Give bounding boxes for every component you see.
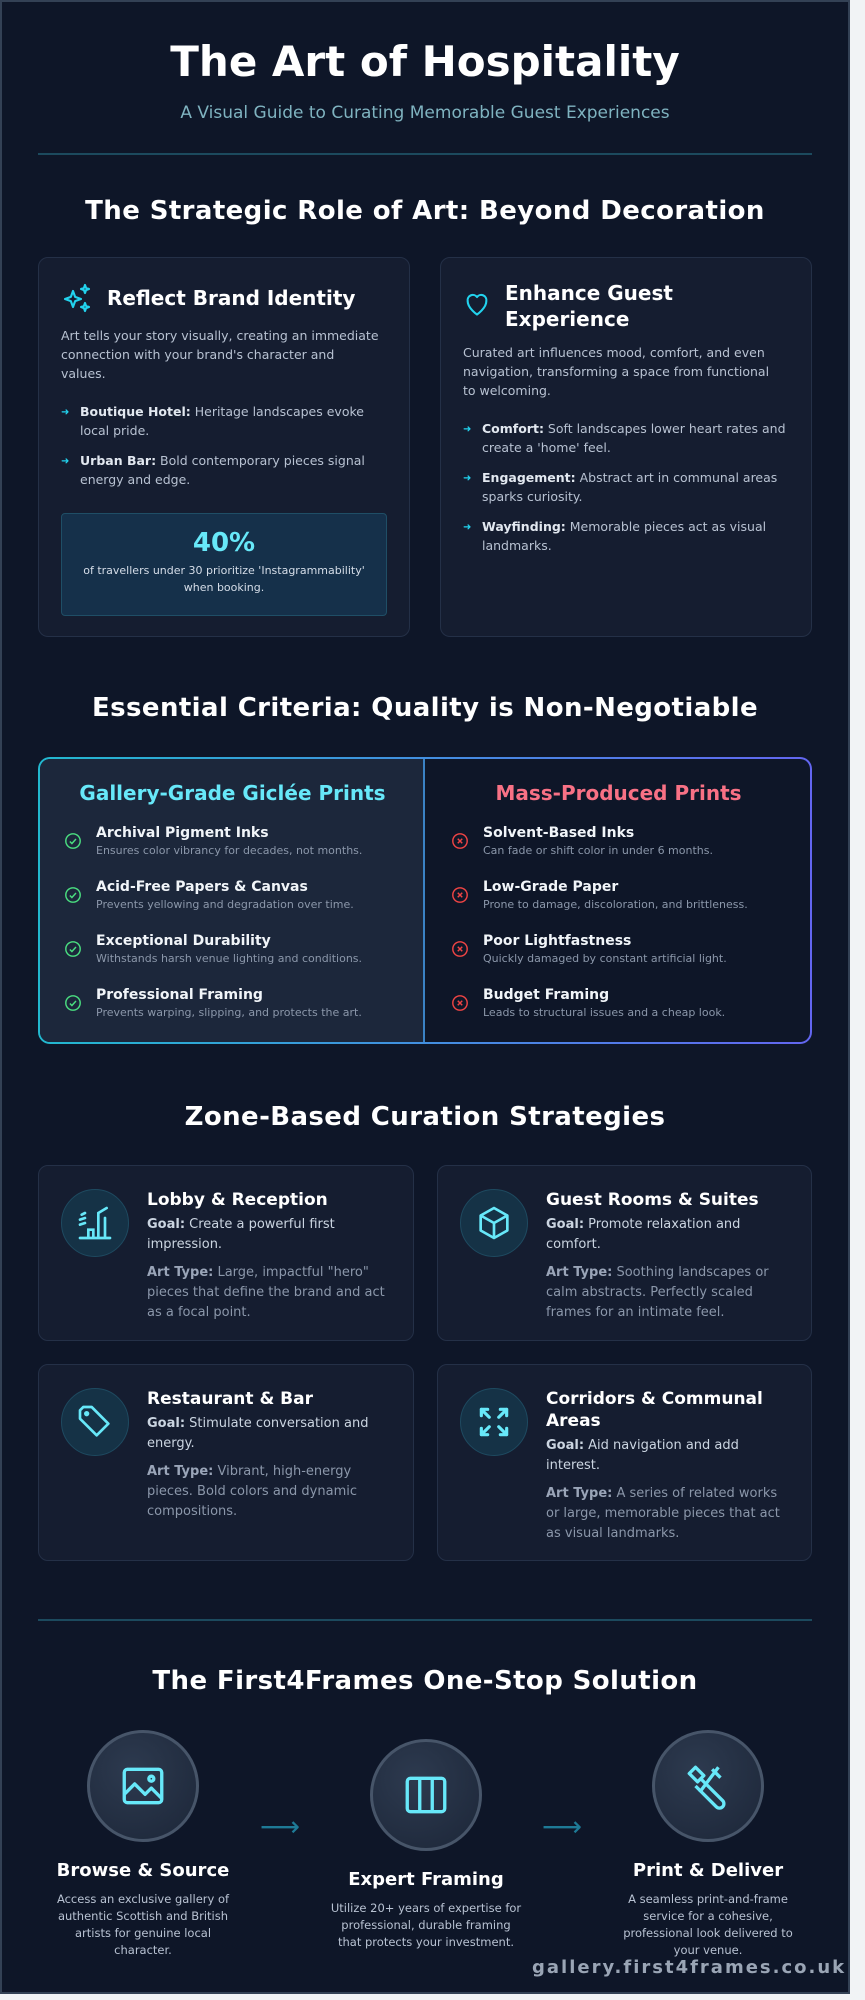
icon: cube bbox=[460, 1189, 528, 1257]
column: gallery-grade: Gallery-Grade Giclée Prints bbox=[79, 781, 386, 805]
step: print & deliver bbox=[623, 1730, 793, 1957]
panel: lobby: Art Type: Large, impactful "hero" pieces that define the brand and act as a focal point. bbox=[147, 1265, 385, 1320]
card title: Reflect Brand Identity bbox=[107, 286, 355, 310]
column: mass-produced bbox=[452, 781, 748, 1019]
column: mass-produced: Low-Grade Paper bbox=[483, 879, 618, 895]
panel: corridors: Areas bbox=[546, 1411, 601, 1431]
panel: guest rooms: Art Type: Soothing landscapes or calm abstracts. Perfectly scaled frames for an intimate feel. bbox=[546, 1265, 769, 1320]
panel: enhance guest experience bbox=[440, 257, 812, 637]
callout: 40% stat bbox=[61, 513, 387, 616]
card title: Enhance Guest bbox=[505, 281, 673, 305]
arrow: ⟶ bbox=[542, 1810, 582, 1843]
panel: corridors: Goal: Aid navigation and add interest. bbox=[546, 1438, 739, 1473]
panel: restaurant: Goal: Stimulate conversation and energy. bbox=[147, 1416, 368, 1451]
heading: one-stop solution: The First4Frames One-Stop Solution bbox=[152, 1666, 698, 1696]
card title: Experience bbox=[505, 307, 629, 331]
panel: lobby bbox=[38, 1165, 414, 1341]
panel: restaurant bbox=[38, 1364, 414, 1561]
column: gallery-grade: Acid-Free Papers & Canvas bbox=[96, 879, 308, 895]
panel: corridors: Corridors & Communal bbox=[546, 1389, 763, 1409]
subtitle: A Visual Guide to Curating Memorable Guest Experiences bbox=[180, 103, 670, 123]
column: mass-produced: Budget Framing bbox=[483, 987, 609, 1003]
step: browse & source bbox=[57, 1730, 230, 1957]
footer url: gallery.first4frames.co.uk bbox=[532, 1957, 846, 1978]
step: expert framing: Utilize 20+ years of expertise for bbox=[331, 1901, 521, 1915]
column: mass-produced: Solvent-Based Inks bbox=[483, 825, 634, 841]
column: gallery-grade: Ensures color vibrancy for decades, not months. bbox=[96, 844, 362, 857]
callout: 40% stat: of travellers under 30 prioritize 'Instagrammability' bbox=[83, 564, 365, 577]
panel: guest rooms: Goal: Promote relaxation and comfort. bbox=[546, 1217, 740, 1252]
bullets bbox=[62, 404, 365, 487]
title: The Art of Hospitality bbox=[170, 37, 680, 86]
step: expert framing: that protects your investment. bbox=[338, 1935, 514, 1949]
bullets: Wayfinding: Memorable pieces act as visual landmarks. bbox=[482, 519, 766, 553]
column: gallery-grade: Exceptional Durability bbox=[96, 933, 271, 949]
callout: 40% stat: 40% bbox=[193, 528, 255, 558]
icon: tag bbox=[61, 1388, 129, 1456]
panel: restaurant: Restaurant & Bar bbox=[147, 1389, 313, 1409]
panel: lobby: Lobby & Reception bbox=[147, 1190, 328, 1210]
column: gallery-grade: Professional Framing bbox=[96, 987, 263, 1003]
column: mass-produced: Mass-Produced Prints bbox=[495, 781, 742, 805]
icon: building bbox=[61, 1189, 129, 1257]
panel: lobby: Goal: Create a powerful first impression. bbox=[147, 1217, 335, 1252]
card title bbox=[505, 281, 673, 331]
callout: 40% stat: when booking. bbox=[184, 581, 264, 594]
bullets: Urban Bar: Bold contemporary pieces signal energy and edge. bbox=[80, 453, 365, 487]
icon: sparkles bbox=[64, 284, 90, 312]
panel: guest rooms bbox=[437, 1165, 812, 1341]
column: gallery-grade bbox=[40, 759, 425, 1042]
column: gallery-grade: Archival Pigment Inks bbox=[96, 825, 269, 841]
panel: reflect brand identity bbox=[38, 257, 410, 637]
step: print & deliver: Print & Deliver bbox=[633, 1860, 783, 1881]
bullets: Engagement: Abstract art in communal areas sparks curiosity. bbox=[482, 470, 777, 504]
step: expert framing: Expert Framing bbox=[348, 1869, 504, 1890]
bullets: Comfort: Soft landscapes lower heart rates and create a 'home' feel. bbox=[482, 421, 786, 455]
arrow: ⟶ bbox=[260, 1810, 300, 1843]
step: browse & source: Access an exclusive gallery of authentic Scottish and British artists for genuine local character. bbox=[57, 1892, 229, 1957]
column: gallery-grade: Prevents yellowing and degradation over time. bbox=[96, 898, 354, 911]
icon: expand arrows bbox=[460, 1388, 528, 1456]
column: mass-produced: Quickly damaged by constant artificial light. bbox=[483, 952, 727, 965]
step: print & deliver: A seamless print-and-frame service for a cohesive, professional look delivered to your venue. bbox=[623, 1892, 793, 1957]
icon: heart bbox=[466, 294, 488, 316]
column: mass-produced: Poor Lightfastness bbox=[483, 933, 631, 949]
panel: corridors bbox=[437, 1364, 812, 1561]
panel: restaurant: Art Type: Vibrant, high-energy pieces. Bold colors and dynamic compositions. bbox=[147, 1464, 357, 1519]
step: expert framing: professional, durable framing bbox=[341, 1918, 511, 1932]
panel: corridors: Art Type: A series of related works or large, memorable pieces that act as visual landmarks. bbox=[546, 1486, 780, 1541]
step: expert framing bbox=[331, 1739, 522, 1949]
heading: strategic role: The Strategic Role of Art: Beyond Decoration bbox=[85, 196, 765, 226]
column: mass-produced: Prone to damage, discoloration, and brittleness. bbox=[483, 898, 748, 911]
column: mass-produced: Can fade or shift color in under 6 months. bbox=[483, 844, 713, 857]
text block: Art tells your story visually, creating an immediate connection with your brand's character and values. bbox=[61, 328, 379, 381]
bullets: Boutique Hotel: Heritage landscapes evoke local pride. bbox=[80, 404, 364, 438]
column: gallery-grade: Withstands harsh venue lighting and conditions. bbox=[96, 952, 362, 965]
column: gallery-grade: Prevents warping, slipping, and protects the art. bbox=[96, 1006, 362, 1019]
heading: essential criteria: Essential Criteria: Quality is Non-Negotiable bbox=[92, 693, 758, 723]
heading: zones: Zone-Based Curation Strategies bbox=[185, 1102, 665, 1132]
step: browse & source: Browse & Source bbox=[57, 1860, 229, 1881]
text block: Curated art influences mood, comfort, and even navigation, transforming a space from functional to welcoming. bbox=[463, 345, 769, 398]
column: mass-produced: Leads to structural issues and a cheap look. bbox=[483, 1006, 725, 1019]
bullets bbox=[464, 421, 786, 553]
panel: guest rooms: Guest Rooms & Suites bbox=[546, 1190, 759, 1210]
comparison panel bbox=[38, 757, 812, 1044]
